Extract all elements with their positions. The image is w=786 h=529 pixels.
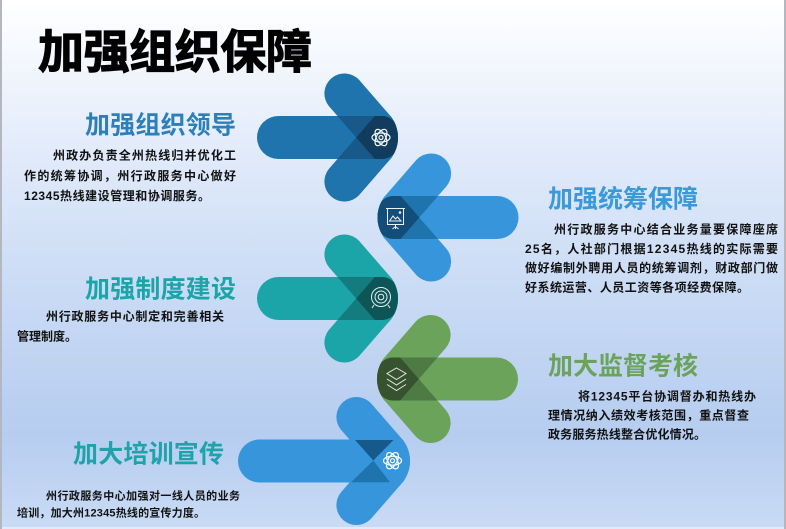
heading: 加强统筹保障: 加强统筹保障 <box>548 186 698 214</box>
overlap triangle: top <box>355 440 394 460</box>
text: supervision: 将12345平台协调督办和热线办 <box>578 388 756 404</box>
text: training and publicity: 培训，加大州12345热线的宣传力度。 <box>17 506 205 520</box>
text: institution building: 州行政服务中心制定和完善相关 <box>46 308 224 324</box>
arrow: training and publicity <box>238 397 410 525</box>
text: overall coordination: 做好编制外聘用人员的统筹调剂，财政部门做 <box>525 260 778 275</box>
text: overall coordination: 州行政服务中心结合业务量要保障座席 <box>554 222 778 236</box>
text: training and publicity <box>17 488 240 520</box>
text: supervision: 政务服务热线整合优化情况。 <box>548 426 706 442</box>
text: supervision <box>548 388 756 442</box>
heading: 加大监督考核: 加大监督考核 <box>548 352 698 380</box>
arrow: institution building <box>257 234 398 363</box>
arrow: overall coordination <box>378 153 518 282</box>
text: organization leadership: 12345热线建设管理和协调服务。 <box>24 188 210 203</box>
text: institution building <box>17 308 224 344</box>
text: organization leadership: 作的统筹协调，州行政服务中心做好 <box>24 168 236 183</box>
icon: target <box>372 288 390 308</box>
heading: 加强制度建设: 加强制度建设 <box>85 276 236 304</box>
text: overall coordination: 25名，人社部门根据12345热线的实际需要 <box>525 241 778 256</box>
text: training and publicity: 州行政服务中心加强对一线人员的业务 <box>46 488 240 502</box>
arrow: organization leadership <box>257 73 398 202</box>
heading: 加强组织领导: 加强组织领导 <box>85 112 236 140</box>
text: organization leadership: 州政办负责全州热线归并优化工 <box>53 148 236 162</box>
heading: 加大培训宣传: 加大培训宣传 <box>73 440 224 468</box>
overlap triangle: bottom <box>351 460 390 482</box>
icon: presentation board <box>386 208 405 229</box>
text: overall coordination: 好系统运营、人员工资等各项经费保障。 <box>525 280 749 294</box>
text: overall coordination <box>525 222 778 294</box>
arrow: supervision <box>377 315 518 443</box>
text: supervision: 理情况纳入绩效考核范围，重点督查 <box>548 408 749 422</box>
title: 加强组织保障 <box>38 26 312 78</box>
text: institution building: 管理制度。 <box>17 328 77 344</box>
text: organization leadership <box>24 148 236 203</box>
icon: layers <box>387 368 406 390</box>
icon: atom <box>372 127 390 148</box>
icon: atom <box>384 451 402 471</box>
